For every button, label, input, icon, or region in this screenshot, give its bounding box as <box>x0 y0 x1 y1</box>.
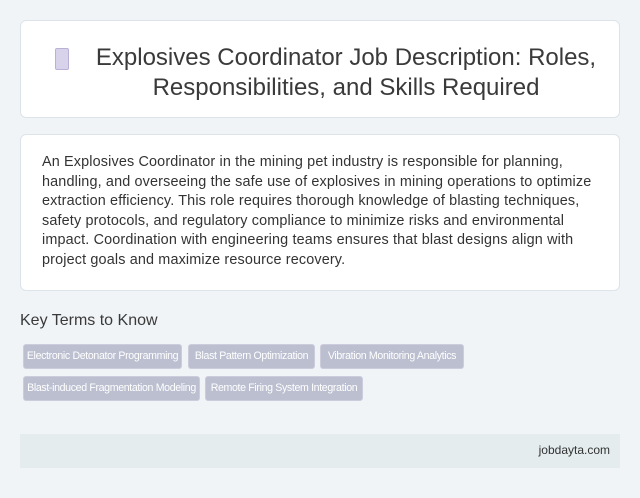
tag 4 <box>23 376 200 401</box>
tag 4: Blast-induced Fragmentation Modeling <box>27 382 196 394</box>
description text <box>42 154 591 268</box>
description text: project goals and maximize resource recovery. <box>42 252 345 268</box>
description text: An Explosives Coordinator in the mining pet industry is responsible for planning, <box>42 154 563 170</box>
description text: extraction efficiency. This role requires thorough knowledge of blasting techniques, <box>42 193 579 209</box>
tag 5: Remote Firing System Integration <box>211 382 357 394</box>
icon: document <box>55 48 69 70</box>
header card <box>20 20 620 118</box>
tag 2: Blast Pattern Optimization <box>195 350 308 362</box>
title: Explosives Coordinator Job Description: Roles, Responsibilities, and Skills Required <box>96 44 596 101</box>
tag 2 <box>188 344 315 369</box>
tag 3 <box>320 344 464 369</box>
description text: safety protocols, and regulatory compliance to minimize risks and environmental <box>42 213 564 229</box>
tag 1: Electronic Detonator Programming <box>27 350 178 362</box>
description text: impact. Coordination with engineering teams ensures that blast designs align with <box>42 232 573 248</box>
description text: handling, and overseeing the safe use of explosives in mining operations to optimize <box>42 174 591 190</box>
tag 1 <box>23 344 182 369</box>
tag 5 <box>205 376 363 401</box>
tags <box>23 344 464 401</box>
description card <box>20 134 620 291</box>
tag 3: Vibration Monitoring Analytics <box>328 350 456 362</box>
key terms heading: Key Terms to Know <box>20 312 158 329</box>
footer <box>20 434 620 468</box>
footer source: jobdayta.com <box>539 443 610 457</box>
